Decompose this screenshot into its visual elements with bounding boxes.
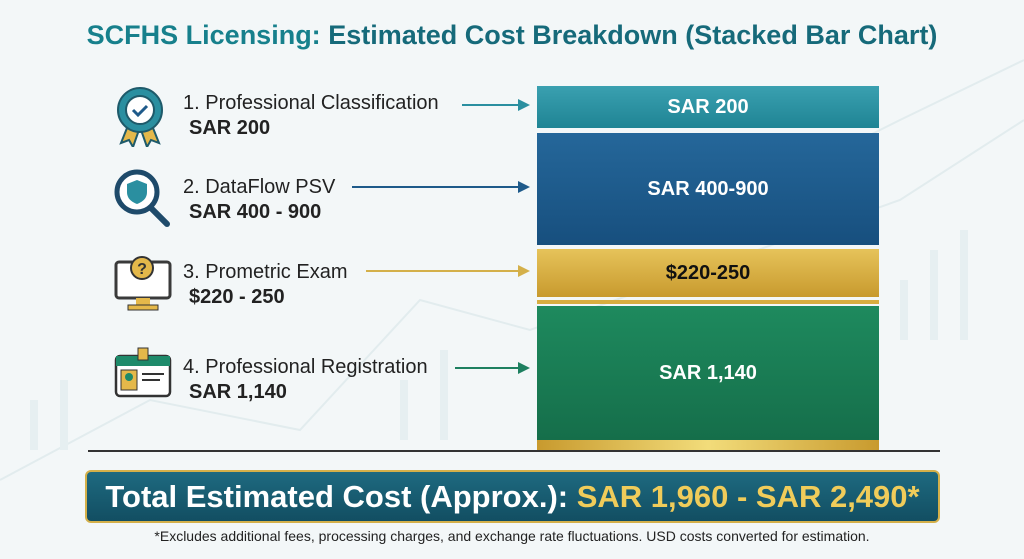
segment: registration — [537, 306, 879, 440]
label 1: SAR 200 — [189, 117, 270, 139]
segment: exam strip — [537, 300, 879, 304]
segment: classification: SAR 200 — [667, 96, 749, 118]
label 3: 3. Prometric Exam — [183, 261, 347, 283]
total cost banner: Total Estimated Cost (Approx.): — [105, 478, 568, 514]
segment: PSV — [537, 133, 879, 245]
icon: magnifier — [114, 170, 170, 227]
title: SCFHS Licensing: Estimated Cost Breakdown (Stacked Bar Chart) — [87, 20, 937, 50]
stacked bar chart — [537, 86, 879, 450]
segment: classification — [537, 86, 879, 128]
segment: gold base — [537, 440, 879, 450]
label 1: 1. Professional Classification — [183, 92, 439, 114]
baseline — [88, 450, 940, 452]
segment: exam: $220-250 — [666, 262, 750, 284]
label 3 — [183, 261, 347, 308]
footnote: *Excludes additional fees, processing charges, and exchange rate fluctuations. USD costs converted for estimation. — [154, 528, 870, 544]
total cost banner: SAR 1,960 - SAR 2,490* — [577, 478, 920, 514]
segment: PSV: SAR 400-900 — [647, 178, 769, 200]
arrow 4 — [455, 362, 530, 374]
total cost banner — [85, 470, 940, 523]
icon: monitor — [114, 256, 172, 310]
segment: registration: SAR 1,140 — [659, 362, 757, 384]
label 4: 4. Professional Registration — [183, 356, 428, 378]
segment: exam — [537, 249, 879, 297]
icon: award badge — [117, 87, 163, 147]
label 1 — [183, 92, 439, 139]
icon: id card — [114, 348, 172, 398]
label 2 — [183, 176, 336, 223]
arrow 3 — [366, 265, 530, 277]
arrow 2 — [352, 181, 530, 193]
label 3: $220 - 250 — [189, 286, 285, 308]
label 4: SAR 1,140 — [189, 381, 287, 403]
icon: monitor: ? — [137, 261, 147, 278]
label 2: 2. DataFlow PSV — [183, 176, 335, 198]
label 4 — [183, 356, 428, 403]
label 2: SAR 400 - 900 — [189, 201, 321, 223]
arrow 1 — [462, 99, 530, 111]
